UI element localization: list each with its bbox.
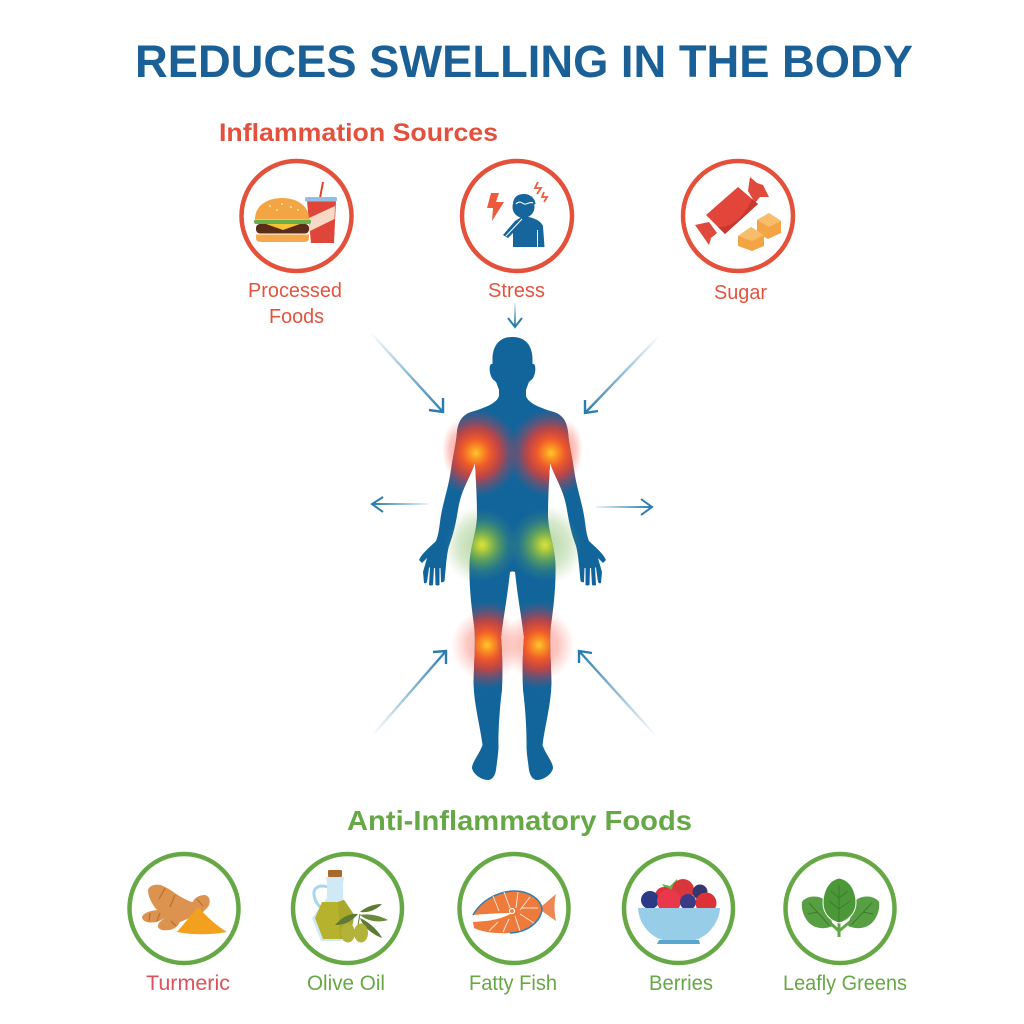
label: sugar: Sugar [714,282,767,304]
icon: salmon steak [473,891,556,933]
label: fatty fish: Fatty Fish [469,972,557,995]
panel: berries [624,854,733,995]
label: processed foods: Foods [269,306,324,328]
panel: sugar [683,161,793,304]
silhouette [419,337,606,780]
arrow: outward left [372,497,428,512]
label: turmeric: Turmeric [146,972,230,995]
icon: burger and soda [254,182,337,243]
hot spots on body [448,410,577,688]
arrow: lower right to body [579,651,656,736]
title: REDUCES SWELLING IN THE BODY [135,36,913,87]
icon: spinach leaves [802,878,879,937]
heading: inflammation sources: Inflammation Sources [219,119,498,147]
panel: processed foods [242,161,352,328]
soft halo behind body [442,420,585,681]
label: processed foods [248,280,342,328]
panel: olive oil [293,854,402,995]
panel: turmeric [130,854,238,995]
arrow: processed foods to body [370,332,443,412]
icon: turmeric root and powder [142,885,227,934]
icon: olive oil bottle and branch [312,870,388,942]
arrow: outward right [596,499,652,515]
arrow: lower left to body [372,651,446,736]
panel: stress [462,161,572,302]
arrow: stress to body [508,303,522,327]
icon: candy and sugar cubes [695,177,781,251]
icon: stressed person with lightning [487,182,547,247]
label: olive oil: Olive Oil [307,972,385,995]
arrow: sugar to body [585,335,660,413]
label: processed foods: Processed [248,280,342,302]
label: stress: Stress [488,280,545,302]
icon: bowl of berries [638,879,720,944]
panel: leafy greens [783,854,907,995]
panel: fatty fish [460,854,568,995]
chart: human body silhouette with inflammation spots [419,337,606,780]
label: leafy greens: Leafly Greens [783,972,907,995]
heading: anti-inflammatory foods: Anti-Inflammatory Foods [347,805,692,836]
label: berries: Berries [649,972,713,995]
